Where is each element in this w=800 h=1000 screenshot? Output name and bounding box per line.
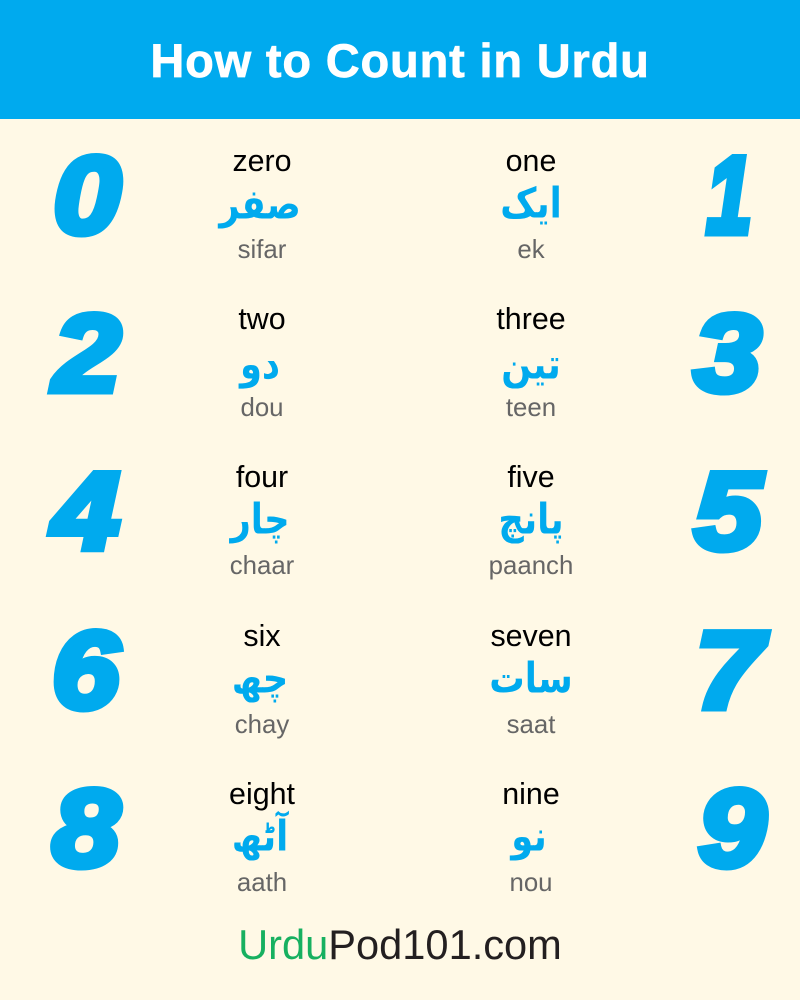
urdu word: eight: آٹھ (232, 812, 288, 860)
english word: five: five (507, 460, 555, 494)
transliteration: teen: teen (506, 394, 556, 422)
header banner (0, 0, 800, 119)
urdu word: four: چار (230, 495, 290, 543)
english word: one: one (506, 144, 556, 178)
transliteration: sifar: sifar (238, 236, 286, 264)
transliteration: saat: saat (507, 711, 555, 739)
english word: nine: nine (502, 777, 560, 811)
urdu word: two: دو (240, 340, 280, 388)
transliteration: chaar: chaar (230, 552, 294, 580)
numeral 6: 6 (52, 608, 120, 732)
numeral 2: 2 (51, 291, 121, 415)
numeral 9: 9 (698, 766, 766, 890)
transliteration: paanch: paanch (489, 552, 573, 580)
transliteration: aath: aath (237, 869, 287, 897)
title: How to Count in Urdu (150, 34, 650, 87)
urdu word: five: پانچ (498, 495, 564, 543)
urdu word: zero: صفر (219, 180, 301, 228)
numeral 0: 0 (53, 133, 121, 257)
english word: three: three (496, 302, 566, 336)
numeral 5: 5 (694, 449, 763, 573)
footer brand: UrduPod101.com (238, 921, 562, 968)
numeral 8: 8 (52, 766, 120, 890)
urdu word: one: ایک (500, 179, 562, 227)
urdu word: six: چھ (232, 654, 288, 702)
english word: zero: zero (232, 144, 292, 178)
english word: six: six (243, 619, 281, 653)
numeral 7: 7 (695, 608, 768, 732)
english word: four: four (236, 460, 288, 494)
urdu word: nine: نو (511, 812, 547, 860)
english word: eight: eight (229, 777, 295, 811)
numeral 1: 1 (706, 133, 752, 257)
transliteration: dou: dou (240, 394, 284, 422)
transliteration: nou: nou (509, 869, 553, 897)
english word: seven: seven (490, 619, 572, 653)
numeral 3: 3 (694, 291, 761, 415)
urdu word: seven: سات (489, 654, 573, 702)
numeral 4: 4 (50, 449, 120, 573)
english word: two: two (238, 302, 286, 336)
urdu word: three: تین (501, 340, 561, 388)
transliteration: ek: ek (517, 236, 545, 264)
transliteration: chay: chay (235, 711, 289, 739)
